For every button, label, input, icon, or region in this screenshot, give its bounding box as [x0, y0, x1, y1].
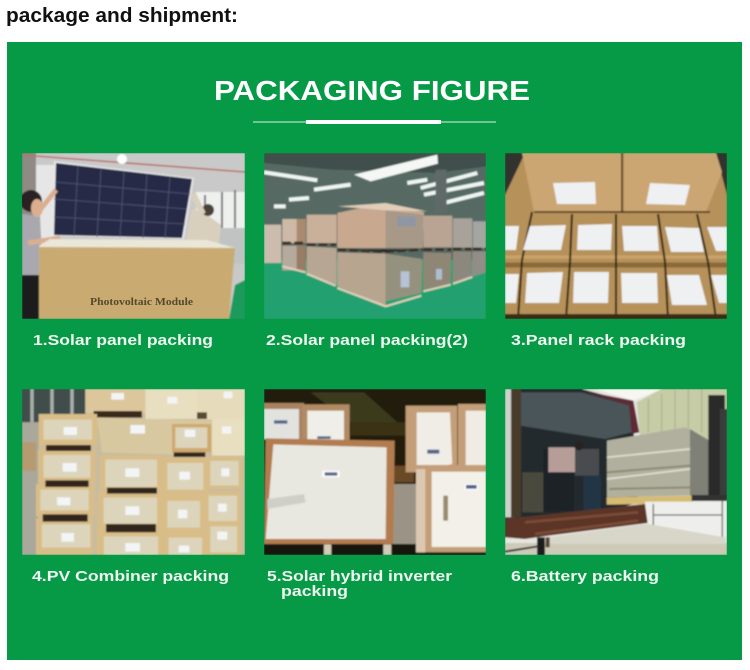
- caption 6: 6.Battery packing: [511, 568, 659, 585]
- photo 4: wooden crates: [22, 389, 245, 555]
- caption 5 second line: packing: [281, 583, 348, 600]
- caption 5: 5.Solar hybrid inverter: [267, 568, 452, 585]
- title underline: [253, 120, 496, 124]
- photo 1: solar panel packing: [20, 153, 245, 319]
- photo 3: cartons: [505, 153, 727, 319]
- photo 5: inverter crates: [264, 389, 486, 555]
- page heading: package and shipment:: [6, 5, 238, 27]
- box text: Photovoltaic Module: [90, 297, 193, 308]
- caption 2: 2.Solar panel packing(2): [266, 332, 468, 349]
- photo 6: battery loading: [505, 389, 727, 555]
- caption 1: 1.Solar panel packing: [33, 332, 213, 349]
- caption 3: 3.Panel rack packing: [511, 332, 686, 349]
- photo 2: warehouse: [264, 153, 486, 319]
- caption 4: 4.PV Combiner packing: [32, 568, 229, 585]
- title: PACKAGING FIGURE: [214, 75, 530, 106]
